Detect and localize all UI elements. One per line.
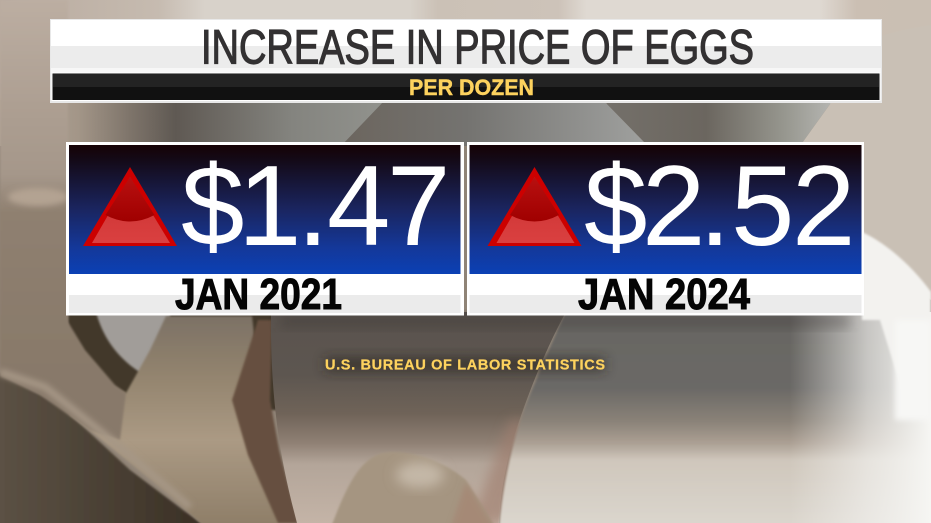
left carton wall <box>0 0 126 440</box>
carton ridge <box>70 316 298 523</box>
date label: JAN 2024 <box>578 270 750 319</box>
shadowed recess under panel <box>68 312 280 410</box>
price: $1.47 <box>181 143 450 270</box>
panel: Jan 2021 <box>66 142 464 319</box>
header banner <box>50 19 882 103</box>
subtitle bar <box>52 73 880 100</box>
panel: Jan 2024 <box>467 142 864 319</box>
lower-left shadow <box>0 370 210 523</box>
date label: JAN 2021 <box>175 270 342 319</box>
right egg <box>499 312 931 523</box>
subtitle: PER DOZEN <box>409 75 534 100</box>
upper band between banner and panels <box>0 100 400 146</box>
white egg fade <box>790 312 931 523</box>
left egg <box>96 312 170 385</box>
icon: red up triangle <box>83 167 177 246</box>
price: $2.52 <box>584 143 855 270</box>
icon: red up triangle <box>488 167 582 246</box>
central egg <box>271 312 566 523</box>
title: INCREASE IN PRICE OF EGGS <box>201 22 754 74</box>
source credit: U.S. BUREAU OF LABOR STATISTICS <box>325 358 605 374</box>
shaded brown fold <box>232 320 298 523</box>
panel shadow <box>280 314 850 328</box>
front carton peak <box>330 452 496 523</box>
